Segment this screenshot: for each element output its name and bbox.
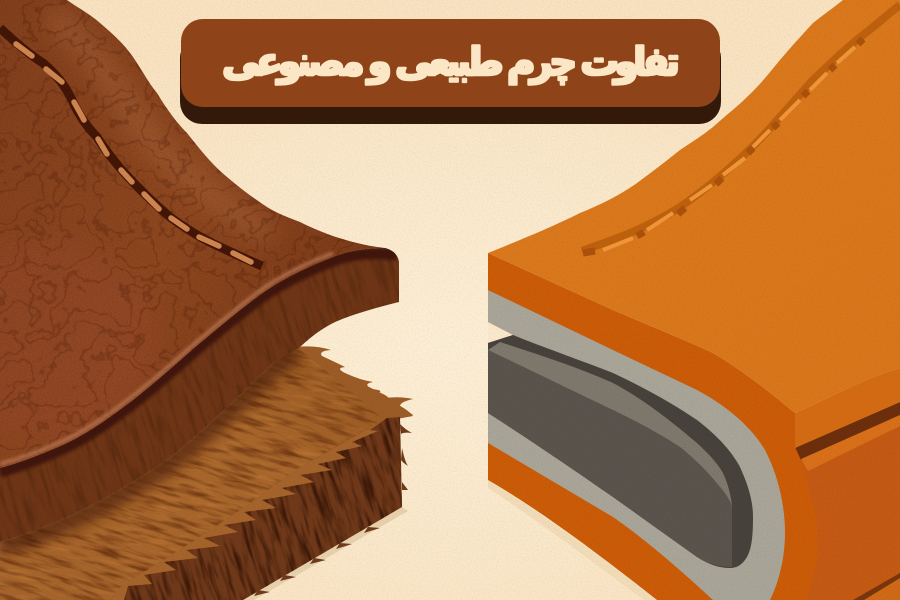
fibre tips <box>297 346 413 421</box>
ground shadow <box>488 480 657 600</box>
seam thread holes <box>583 39 863 253</box>
stitches <box>16 44 251 262</box>
leather cut edge <box>0 248 399 542</box>
title banner <box>180 19 721 124</box>
lower right panel <box>795 402 900 600</box>
orange wrap front <box>488 253 817 600</box>
suede fibre layer side <box>110 417 412 600</box>
core main face <box>488 350 732 567</box>
title text: تفاوت چرم طبیعی و مصنوعی <box>222 40 680 85</box>
seam stitches <box>603 47 855 250</box>
synthetic leather illustration <box>488 0 900 600</box>
suede fibre layer top <box>0 346 413 600</box>
natural leather illustration <box>0 0 413 600</box>
orange top surface <box>488 0 900 413</box>
orange top right face <box>795 368 900 448</box>
front edge fibre teeth <box>110 418 387 600</box>
banner face <box>181 19 720 107</box>
core highlight ridge <box>488 342 732 507</box>
leather top surface <box>0 0 400 470</box>
orange seam groove <box>582 5 900 251</box>
side fringe spikes <box>254 424 412 596</box>
stitched groove <box>0 28 262 266</box>
dark fabric core <box>488 335 753 568</box>
gap between layers <box>488 322 513 343</box>
banner shadow <box>180 36 721 124</box>
fur shadow on ground <box>243 507 408 600</box>
gray foam backing <box>488 290 785 600</box>
polished front edge <box>0 253 333 464</box>
